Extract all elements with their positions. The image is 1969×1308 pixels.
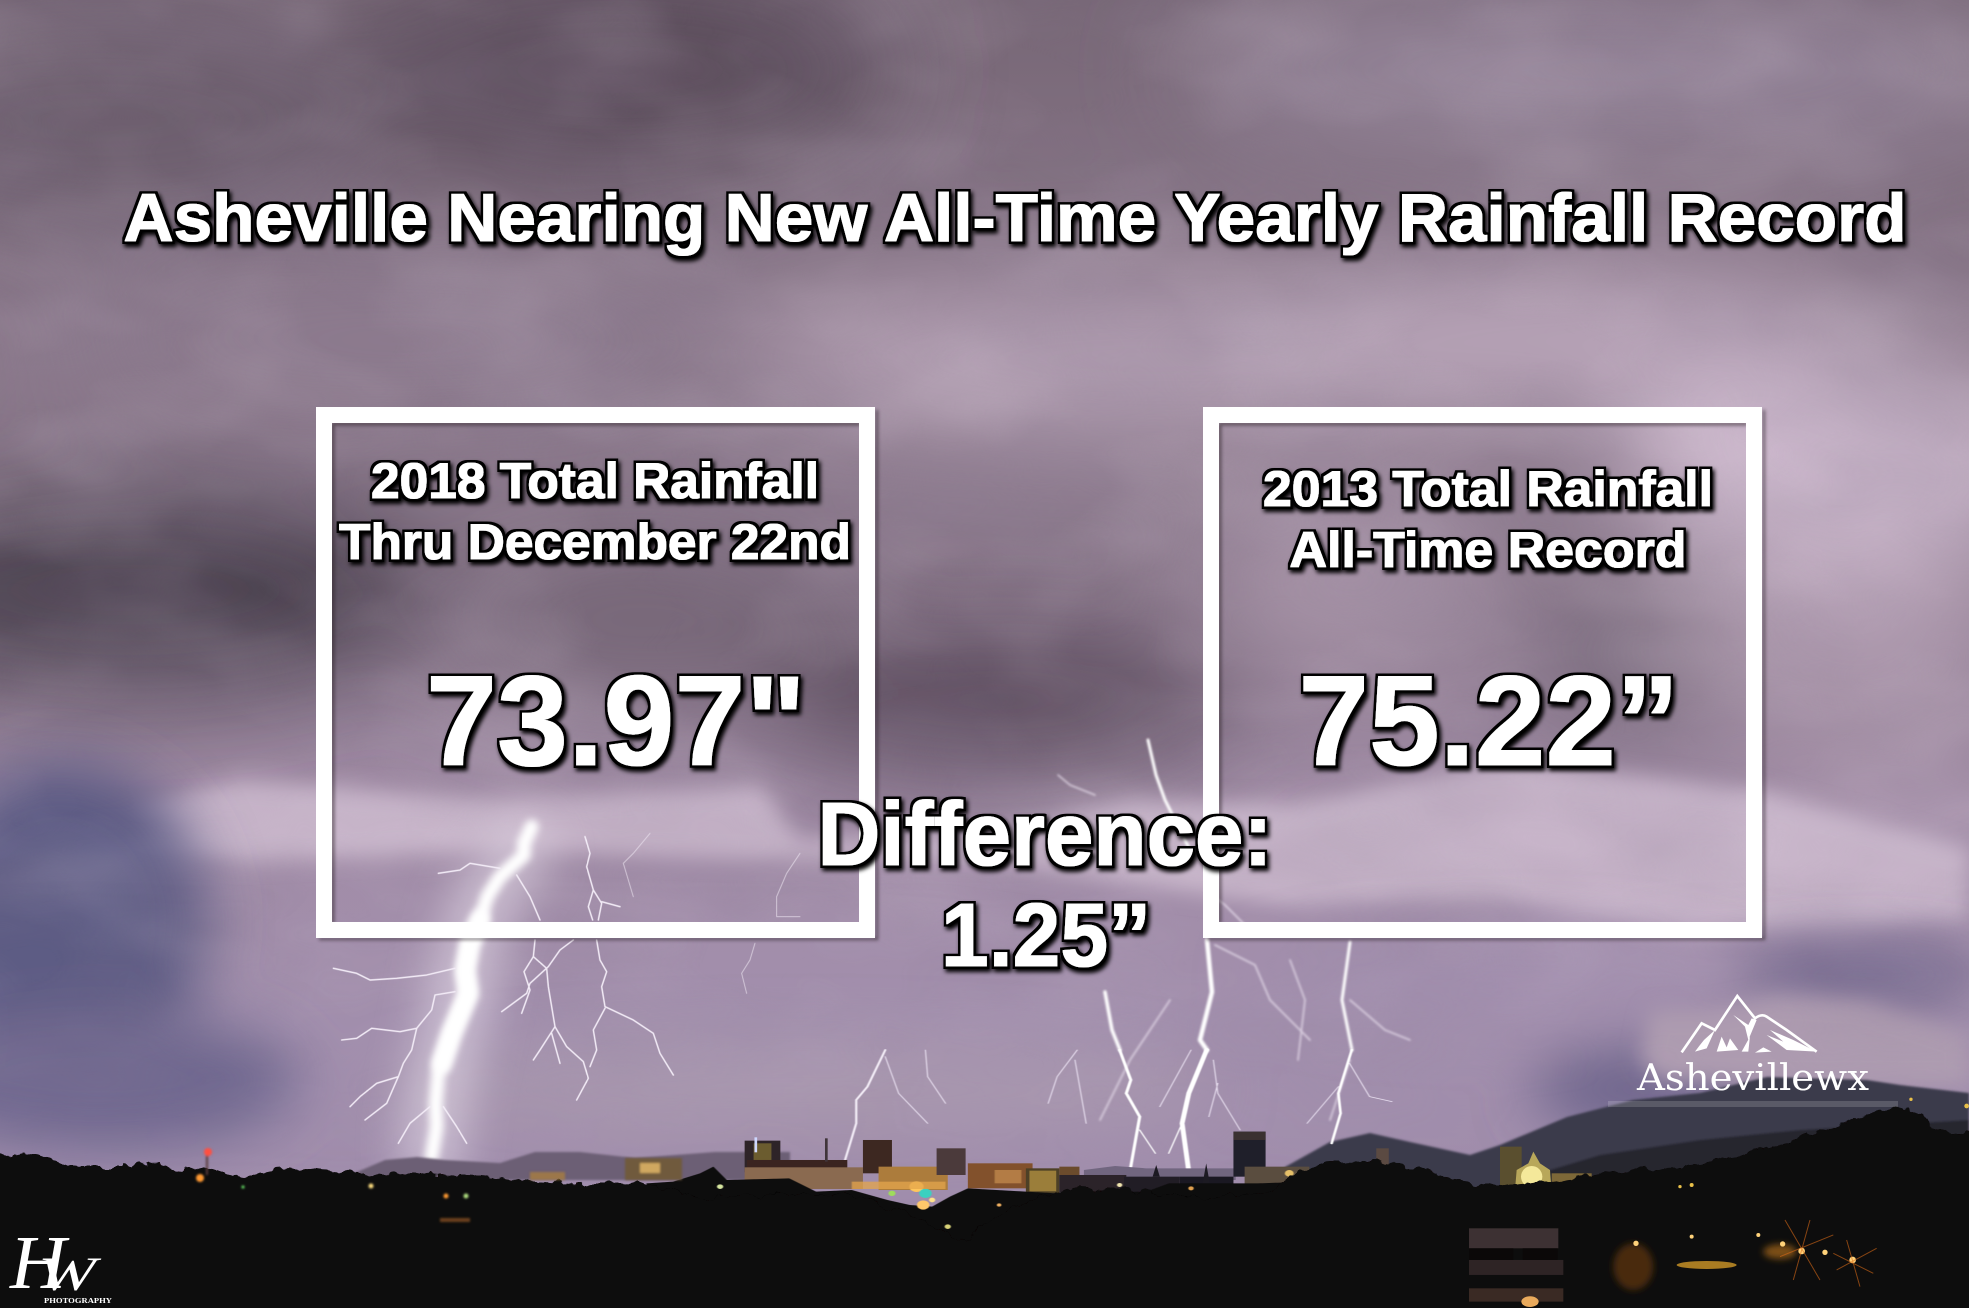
panel: 2013 record box — [1206, 410, 1764, 939]
heading: 2018 total rainfall: 2018 Total Rainfall — [371, 453, 819, 509]
distant hills — [350, 1152, 790, 1180]
photographer signature: PHOTOGRAPHY — [44, 1296, 113, 1305]
callout: difference: Difference: — [818, 785, 1272, 885]
logo: Ashevillewx — [1608, 996, 1898, 1107]
heading: all-time record: All-Time Record — [1290, 522, 1686, 578]
mid tree layer — [646, 1167, 1400, 1250]
photographer signature: H — [9, 1221, 70, 1305]
lightning bolt: main left strike — [333, 827, 800, 1157]
value: 73.97 inches: 73.97" — [426, 650, 806, 793]
office building and street lights lower right — [1469, 1098, 1969, 1307]
far field small lights left — [196, 1148, 565, 1222]
icon: mountains — [1682, 996, 1817, 1053]
left horizon buildings — [625, 1158, 682, 1180]
value: 75.22 inches: 75.22” — [1298, 650, 1680, 793]
lightning bolts: right strikes — [1058, 740, 1410, 1120]
panel: 2018 rainfall box — [319, 410, 877, 939]
photographer signature — [9, 1221, 113, 1305]
city lights — [717, 1170, 1294, 1229]
mountain ridge right — [1285, 1077, 1969, 1210]
asheville hotel lights — [1500, 1147, 1592, 1192]
title: Asheville Nearing New All-Time Yearly Rainfall Record — [124, 180, 1906, 256]
cloud base band — [130, 760, 1969, 935]
lit cloud behind logo — [1640, 995, 1969, 1085]
city skyline and storm bolts near horizon — [646, 1050, 1400, 1250]
buildings — [745, 1132, 1389, 1193]
heading: thru december 22nd: Thru December 22nd — [339, 514, 851, 570]
photographer signature: W — [38, 1248, 102, 1301]
callout: difference — [818, 785, 1272, 986]
callout: difference: 1.25” — [941, 886, 1151, 986]
dark tree line foreground — [0, 1108, 1969, 1308]
heading: 2013 total rainfall: 2013 Total Rainfall — [1263, 461, 1713, 517]
wordmark: Ashevillewx — [1636, 1058, 1869, 1099]
